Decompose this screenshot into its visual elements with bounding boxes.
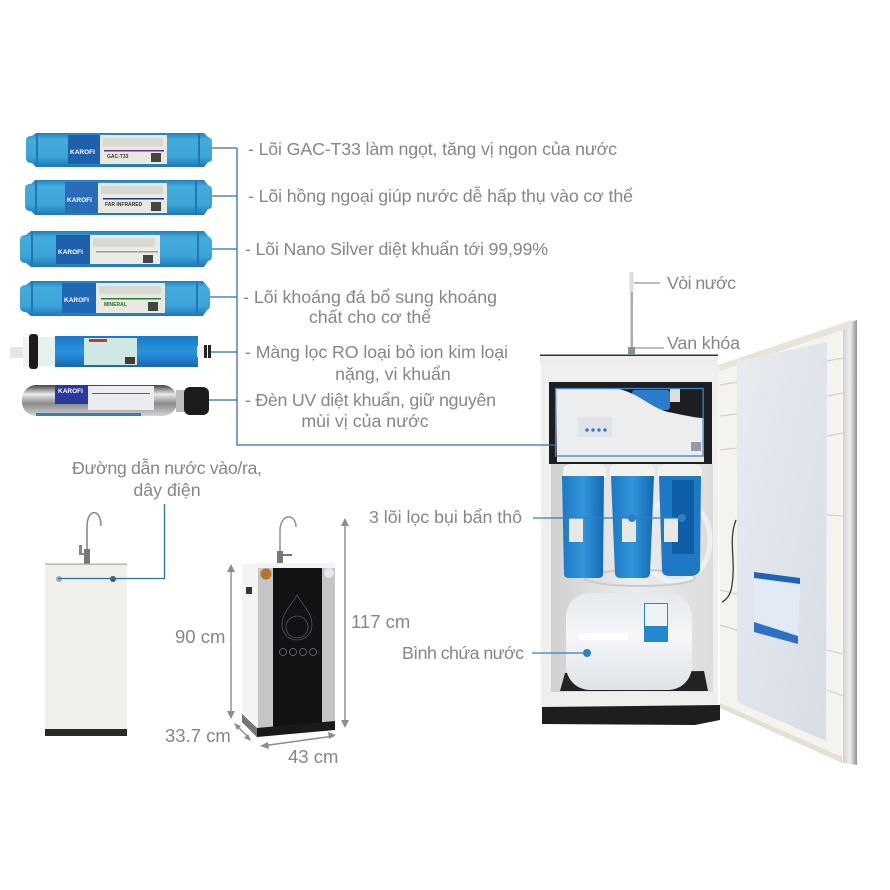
dimension: depth 33.7 cm: 33.7 cm bbox=[165, 725, 231, 746]
RO module bbox=[556, 388, 704, 462]
label: mineral bbox=[243, 287, 497, 327]
filter cartridge: far infrared: FAR INFRARED bbox=[105, 202, 143, 208]
back view of purifier bbox=[45, 513, 127, 736]
leader: tap and valve bbox=[634, 283, 664, 348]
filter cartridge: nano silver: KAROFI bbox=[58, 249, 83, 256]
label: inlet and outlet lines bbox=[72, 457, 262, 500]
label: far infrared: - Lõi hồng ngoại giúp nước dễ hấp thụ vào cơ thể bbox=[248, 185, 633, 206]
label: UV lamp bbox=[245, 390, 496, 431]
filter cartridge: GAC-T33 bbox=[26, 133, 212, 167]
filter cartridge: far infrared: KAROFI bbox=[67, 197, 92, 204]
cabinet body bbox=[540, 354, 718, 707]
leader: coarse filters bbox=[533, 514, 686, 522]
dimension: height 117 cm: 117 cm bbox=[351, 611, 410, 632]
label: UV lamp: - Đèn UV diệt khuẩn, giữ nguyên bbox=[245, 390, 496, 410]
label: inlet and outlet lines: dây điện bbox=[133, 480, 201, 500]
label: RO membrane: nặng, vi khuẩn bbox=[335, 364, 451, 384]
cabinet base bbox=[542, 705, 720, 725]
filter cartridge: mineral: KAROFI bbox=[64, 297, 89, 304]
filter cartridge: mineral: MINERAL bbox=[104, 302, 127, 308]
label: mineral: - Lõi khoáng đá bổ sung khoáng bbox=[243, 287, 497, 307]
connector: inlet line bbox=[58, 504, 164, 578]
UV lamp bbox=[22, 385, 209, 416]
dimension: height 90 cm: 90 cm bbox=[175, 626, 225, 647]
water tank bbox=[560, 593, 708, 691]
three coarse filters bbox=[562, 464, 710, 586]
label: coarse filters: 3 lõi lọc bụi bẩn thô bbox=[369, 507, 522, 527]
label: UV lamp: mùi vị của nước bbox=[301, 411, 429, 431]
label: RO membrane: - Màng lọc RO loại bỏ ion kim loại bbox=[245, 342, 508, 362]
cabinet door bbox=[718, 320, 857, 765]
leader: water tank bbox=[532, 649, 591, 657]
UV lamp: KAROFI bbox=[58, 388, 83, 395]
label: tap: Vòi nước bbox=[667, 273, 736, 293]
label: inlet and outlet lines: Đường dẫn nước vào/ra, bbox=[72, 457, 262, 478]
dimension: width 43 cm: 43 cm bbox=[288, 746, 338, 767]
connector lines: filters to module bbox=[209, 148, 703, 456]
dimension arrows bbox=[227, 518, 349, 749]
label: valve: Van khóa bbox=[667, 333, 740, 353]
tap and valve bbox=[628, 272, 635, 355]
label: water tank: Bình chứa nước bbox=[402, 643, 524, 663]
label: RO membrane bbox=[245, 342, 508, 384]
filter cartridge: mineral bbox=[20, 281, 210, 316]
label: mineral: chất cho cơ thể bbox=[309, 307, 431, 327]
open cabinet with door bbox=[540, 272, 857, 765]
filter cartridge: GAC-T33: KAROFI bbox=[70, 149, 95, 156]
label: GAC-T33: - Lõi GAC-T33 làm ngọt, tăng vị ngon của nước bbox=[248, 139, 617, 159]
filter cartridge: GAC-T33: GAC-T33 bbox=[107, 154, 129, 160]
front view of purifier bbox=[242, 517, 335, 737]
RO membrane bbox=[10, 334, 211, 369]
filter cartridge: far infrared bbox=[25, 180, 212, 215]
label: nano silver: - Lõi Nano Silver diệt khuẩn tới 99,99% bbox=[245, 239, 548, 259]
filter cartridge: nano silver bbox=[20, 231, 212, 267]
